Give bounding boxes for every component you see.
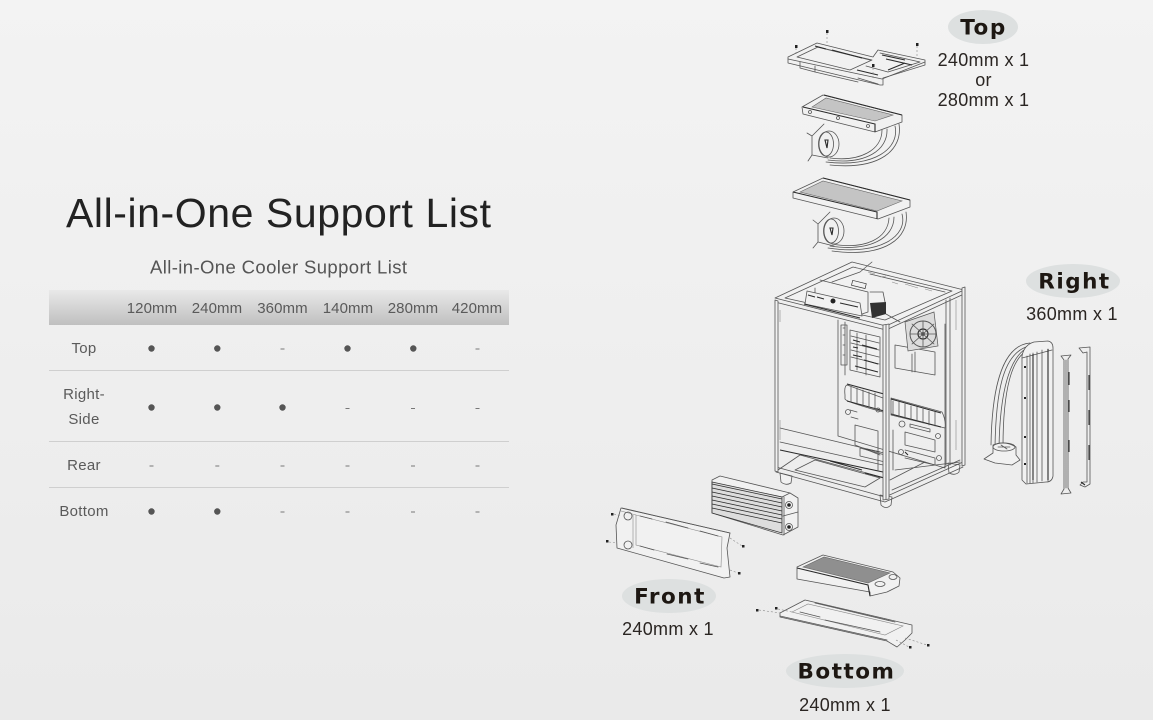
table header row: 280mm (388, 300, 438, 317)
label: Top: Top (960, 16, 1007, 40)
table header row (49, 290, 509, 325)
row: Top: Top (71, 340, 97, 357)
title: All-in-One Support List (66, 190, 492, 236)
front IO panel (805, 291, 862, 316)
mounting bracket (1079, 347, 1090, 487)
case floor (778, 428, 960, 490)
icon: PC case frame (775, 262, 965, 508)
corner posts (775, 300, 778, 472)
label: Front: 240mm x 1 (622, 619, 714, 639)
icon: bottom 240mm radiator (797, 555, 900, 596)
label: Top: or (975, 70, 992, 90)
label: Bottom: Bottom (798, 660, 895, 684)
back panel (838, 320, 945, 468)
label: Right: Right (1038, 270, 1111, 294)
motherboard cutouts (850, 330, 880, 377)
pump (984, 443, 1020, 465)
radiator (1022, 341, 1053, 484)
row: Bottom (59, 503, 480, 520)
mounting strip (1061, 355, 1071, 494)
black cable bundle (870, 302, 886, 318)
icon: front mounting bracket (606, 508, 744, 578)
icon: 240mm liquid cooler (793, 178, 910, 252)
label: Front (622, 579, 716, 639)
label: Top: 240mm x 1 (938, 50, 1029, 70)
label: Bottom: 240mm x 1 (799, 695, 891, 715)
table subtitle: All-in-One Cooler Support List (150, 256, 407, 278)
cable grommet bars (845, 385, 945, 428)
label: Bottom (786, 654, 904, 715)
bottom frame (776, 462, 963, 502)
row: Right-Side: Side (68, 411, 100, 428)
row: Right-Side (49, 386, 509, 442)
label: Right: 360mm x 1 (1026, 304, 1118, 324)
table header row: 120mm (127, 300, 177, 317)
icon: right-side 360mm liquid cooler (984, 341, 1090, 494)
label: Front: Front (634, 584, 706, 610)
support table (49, 290, 509, 520)
icon: front 240mm radiator (712, 476, 798, 535)
table header row: 140mm (323, 300, 373, 317)
label: Top (938, 10, 1029, 110)
row: Top (49, 340, 509, 371)
row: Rear: Rear (67, 457, 101, 474)
fan (895, 345, 935, 375)
top panel (775, 262, 964, 326)
icon: 280mm liquid cooler (802, 95, 902, 166)
row: Right-Side: Right- (63, 386, 105, 403)
label: Right (1026, 264, 1120, 324)
icon: top mounting bracket (788, 30, 925, 85)
icon: bottom mounting bracket (756, 600, 930, 648)
table header row: 420mm (452, 300, 502, 317)
table header row: 240mm (192, 300, 242, 317)
table header row: 360mm (257, 300, 308, 317)
case feet (780, 463, 960, 508)
coolant tubes (991, 343, 1033, 448)
label: Top: 280mm x 1 (938, 90, 1029, 110)
row: Bottom: Bottom (59, 503, 109, 520)
